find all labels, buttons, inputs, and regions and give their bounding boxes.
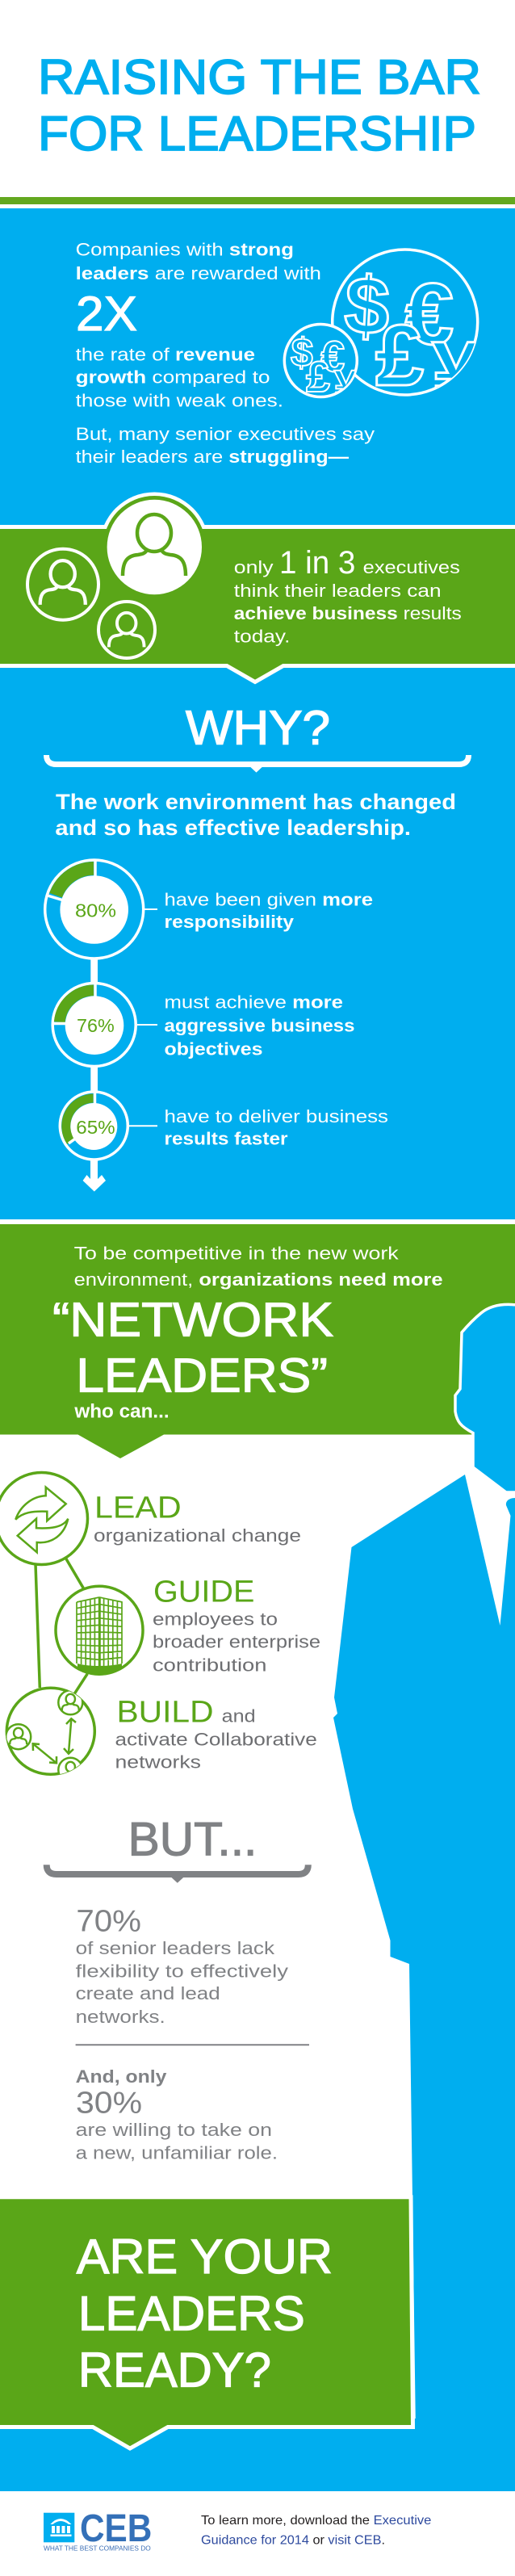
stat: 30%: a new, unfamiliar role.	[76, 2142, 278, 2163]
icon: currency coins: $	[342, 260, 391, 352]
icon: bottom person circle	[98, 602, 155, 658]
intro text: leaders are rewarded with	[76, 263, 321, 283]
icon: currency coins: ¥	[334, 363, 358, 410]
title	[38, 50, 481, 161]
heading: network leaders: LEADERS”	[76, 1349, 328, 1403]
brace: but	[47, 1865, 308, 1883]
connector stems and arrow	[83, 958, 106, 1192]
stat: 70%: of senior leaders lack	[76, 1938, 275, 1958]
footer call to action text	[201, 2514, 431, 2548]
text: build: and	[222, 1706, 256, 1726]
subheading: work environment: The work environment has changed	[56, 790, 456, 814]
heading: network leaders	[52, 1293, 333, 1403]
icon: lead arrows	[0, 1473, 87, 1565]
icon: currency coins: ¥	[432, 323, 480, 421]
icon: left person circle	[27, 549, 98, 620]
text: guide	[153, 1575, 320, 1675]
stat: 2X: 2X	[76, 287, 137, 341]
stat: 1 in 3 executives: only	[234, 557, 274, 577]
text: who can: who can...	[73, 1400, 170, 1422]
stat: 1 in 3 executives: 1 in 3	[279, 545, 355, 581]
panel: executives band	[0, 493, 515, 682]
heading: why: WHY?	[186, 702, 330, 755]
text: competitive environment: environment, organizations need more	[74, 1269, 443, 1290]
silhouette: head	[455, 1304, 515, 1492]
subheading: work environment: and so has effective leadership.	[55, 816, 411, 840]
heading: are your leaders ready: ARE YOUR	[77, 2230, 333, 2284]
heading: but: BUT...	[128, 1813, 257, 1865]
stat: 30%: 30%	[76, 2087, 142, 2121]
text: results faster: have to deliver business	[165, 1106, 388, 1126]
text: lead: LEAD	[94, 1491, 182, 1525]
intro text	[76, 240, 321, 283]
growth text: those with weak ones.	[76, 391, 283, 410]
connector lines between skills	[36, 1559, 87, 1694]
stat: 70%: 70%	[76, 1905, 141, 1939]
text: aggressive objectives: must achieve more	[165, 992, 343, 1013]
icon: currency coins: €	[405, 265, 454, 363]
title: FOR LEADERSHIP	[38, 107, 476, 161]
icon: build network	[6, 1688, 94, 1782]
heading: are your leaders ready	[77, 2230, 333, 2398]
subheading: work environment	[55, 790, 456, 840]
icon: currency coins: £	[306, 354, 330, 401]
panel: call to action	[0, 2197, 413, 2448]
chart: 80% donut: 80%	[75, 900, 116, 921]
text: guide: employees to	[153, 1609, 278, 1629]
brace: why	[47, 755, 468, 773]
stat: 30%: And, only	[76, 2066, 167, 2087]
divider	[76, 2044, 309, 2045]
text: results faster	[165, 1106, 388, 1148]
logo: CEB: CEB	[80, 2507, 152, 2550]
logo: CEB	[44, 2507, 152, 2552]
text: aggressive objectives: aggressive business	[165, 1016, 355, 1035]
icon: guide building	[56, 1586, 143, 1680]
text: responsibility: have been given more	[165, 890, 373, 909]
logo: CEB: WHAT THE BEST COMPANIES DO	[44, 2545, 151, 2552]
green divider bar	[0, 197, 515, 204]
text: build	[115, 1696, 317, 1772]
icon: currency coins	[283, 248, 479, 399]
text: lead	[94, 1491, 301, 1546]
text: responsibility: responsibility	[165, 912, 295, 932]
icon: currency coins: €	[320, 334, 345, 381]
chart: 65% donut: 65%	[76, 1117, 115, 1138]
growth text: the rate of revenue	[76, 344, 255, 365]
struggling text: their leaders are struggling—	[76, 447, 350, 467]
text: results faster: results faster	[165, 1129, 288, 1148]
chart: 76% donut	[52, 984, 157, 1066]
title: RAISING THE BAR	[38, 50, 481, 104]
stat: 1 in 3 executives: achieve business results	[234, 603, 462, 623]
text: guide: broader enterprise	[153, 1632, 320, 1652]
text: aggressive objectives: objectives	[165, 1038, 263, 1059]
icon: currency coins: £	[375, 306, 424, 404]
bottom blue band	[0, 2419, 515, 2491]
text: competitive environment: To be competitive in the new work	[74, 1244, 400, 1264]
stat: 70%: networks.	[76, 2007, 165, 2027]
stat: 1 in 3 executives	[234, 545, 462, 646]
stat: 1 in 3 executives: think their leaders can	[234, 581, 442, 601]
text: guide: contribution	[153, 1655, 266, 1675]
growth text: growth compared to	[76, 367, 270, 388]
text: lead: organizational change	[94, 1525, 301, 1546]
stat: 1 in 3 executives: executives	[363, 557, 460, 577]
struggling text: But, many senior executives say	[76, 424, 375, 444]
text: competitive environment	[74, 1244, 443, 1290]
stat: 30%	[76, 2066, 278, 2163]
text: build: activate Collaborative	[115, 1730, 317, 1750]
icon: currency coins: $	[290, 330, 314, 375]
chart: 65% donut	[60, 1092, 157, 1160]
text: build: networks	[115, 1752, 201, 1772]
stat: 70%: create and lead	[76, 1983, 220, 2003]
struggling text	[76, 424, 375, 467]
chart: 80% donut	[45, 860, 157, 959]
stat: 30%: are willing to take on	[76, 2120, 272, 2140]
text: guide: GUIDE	[153, 1575, 254, 1609]
icon: large person circle	[104, 493, 205, 594]
stat: 1 in 3 executives: today.	[234, 627, 290, 646]
growth text	[76, 344, 283, 410]
stat: 70%: flexibility to effectively	[76, 1961, 288, 1981]
heading: are your leaders ready: LEADERS	[78, 2287, 305, 2341]
heading: network leaders: “NETWORK	[52, 1293, 333, 1346]
chart: 76% donut: 76%	[77, 1015, 115, 1036]
footer call to action text: To learn more, download the Executive	[201, 2514, 431, 2528]
footer call to action text: Guidance for 2014 or visit CEB.	[201, 2534, 385, 2548]
intro text: Companies with strong	[76, 240, 294, 260]
text: aggressive objectives	[165, 992, 355, 1059]
panel: network leaders	[0, 1224, 515, 1458]
silhouette: suit	[333, 1475, 515, 2491]
text: responsibility	[165, 890, 373, 932]
text: build: BUILD	[116, 1696, 213, 1730]
heading: are your leaders ready: READY?	[78, 2343, 271, 2398]
stat: 70%	[76, 1905, 288, 2027]
panel: revenue growth	[0, 208, 515, 1219]
